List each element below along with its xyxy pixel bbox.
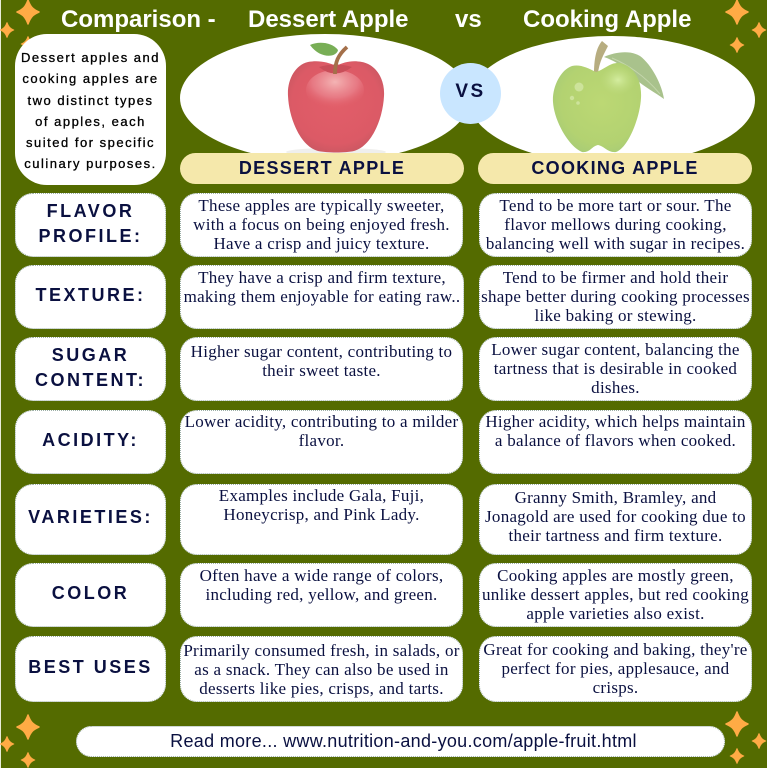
dessert text xyxy=(180,636,463,702)
cooking text: a balance of flavors when cooked. xyxy=(495,431,736,450)
dessert text xyxy=(180,265,464,329)
dessert text: their sweet taste. xyxy=(262,361,381,380)
intro text panel: culinary purposes. xyxy=(24,156,157,171)
footer link: Read more... www.nutrition-and-you.com/apple-fruit.html xyxy=(170,731,637,751)
row: acidity xyxy=(15,410,752,474)
label: TEXTURE: xyxy=(36,284,146,304)
cooking text: Tend to be firmer and hold their xyxy=(503,268,728,287)
cooking text: Granny Smith, Bramley, and xyxy=(515,488,716,507)
dessert text: Honeycrisp, and Pink Lady. xyxy=(223,505,420,524)
row: flavor profile xyxy=(15,193,752,257)
cooking text xyxy=(479,636,752,702)
label xyxy=(15,484,166,555)
intro text panel: Dessert apples and xyxy=(21,50,160,65)
header pill: dessert apple xyxy=(180,153,464,184)
cooking text xyxy=(479,410,752,474)
dessert text xyxy=(180,337,463,401)
cooking text: crisps. xyxy=(593,678,638,697)
cooking text xyxy=(479,265,752,329)
dessert text: including red, yellow, and green. xyxy=(205,585,438,604)
cooking text: balancing well with sugar in recipes. xyxy=(486,234,745,253)
cooking text: tartness that is desirable in cooked xyxy=(494,359,737,378)
green apple xyxy=(553,41,664,152)
dessert text: They have a crisp and firm texture, xyxy=(198,268,446,287)
label: CONTENT: xyxy=(35,370,146,390)
dessert text: as a snack. They can also be used in xyxy=(194,660,449,679)
header pill: cooking apple xyxy=(478,153,752,184)
label: COLOR xyxy=(52,582,129,602)
cooking text: Lower sugar content, balancing the xyxy=(491,340,740,359)
white oval: dessert xyxy=(180,34,470,162)
cooking text: shape better during cooking processes xyxy=(481,287,750,306)
label: FLAVOR xyxy=(47,201,134,221)
label xyxy=(15,636,166,702)
header pill: cooking apple: COOKING APPLE xyxy=(531,158,699,178)
dessert text xyxy=(180,193,463,257)
cooking text xyxy=(479,484,752,555)
cooking text: perfect for pies, applesauce, and xyxy=(502,659,729,678)
cooking text: Tend to be more tart or sour. The xyxy=(499,196,732,215)
title: Cooking Apple xyxy=(523,6,691,33)
row: sugar content xyxy=(15,337,752,401)
white oval: cooking xyxy=(469,36,755,164)
label xyxy=(15,337,166,401)
title: vs xyxy=(455,6,482,33)
intro text panel: cooking apples are xyxy=(22,71,159,86)
label xyxy=(15,563,166,627)
label: SUGAR xyxy=(52,345,129,365)
cooking text xyxy=(479,193,752,257)
dessert text: Lower acidity, contributing to a milder xyxy=(185,412,458,431)
cooking text: unlike dessert apples, but red cooking xyxy=(482,585,749,604)
row: best uses xyxy=(15,636,752,702)
row: varieties xyxy=(15,484,752,555)
footer link xyxy=(76,726,725,757)
label xyxy=(15,410,166,474)
VS badge: VS xyxy=(455,81,486,102)
left edge strip xyxy=(0,0,1,768)
row: texture xyxy=(15,265,752,329)
cooking text: apple varieties also exist. xyxy=(526,604,705,623)
label: VARIETIES: xyxy=(28,507,153,527)
title: Comparison - xyxy=(61,6,216,33)
intro text panel xyxy=(15,34,166,185)
cooking text: their tartness and firm texture. xyxy=(508,526,722,545)
dessert text: Often have a wide range of colors, xyxy=(200,566,443,585)
cooking text xyxy=(479,337,752,401)
cooking text xyxy=(479,563,752,627)
label: BEST USES xyxy=(28,656,153,676)
VS badge xyxy=(440,63,501,124)
title: Dessert Apple xyxy=(248,6,408,33)
cooking text: flavor mellows during cooking, xyxy=(504,215,727,234)
row: color xyxy=(15,563,752,627)
header pill: dessert apple: DESSERT APPLE xyxy=(239,158,405,178)
intro text panel: two distinct types xyxy=(28,93,154,108)
dessert text: flavor. xyxy=(299,431,344,450)
label: PROFILE: xyxy=(38,226,142,246)
dessert text: making them enjoyable for eating raw.. xyxy=(184,287,460,306)
dessert text xyxy=(180,410,463,474)
cooking text: Great for cooking and baking, they're xyxy=(483,640,748,659)
intro text panel: suited for specific xyxy=(26,135,155,150)
title xyxy=(61,6,691,33)
cooking text: dishes. xyxy=(591,378,640,397)
dessert text: These apples are typically sweeter, xyxy=(198,196,445,215)
dessert text: Have a crisp and juicy texture. xyxy=(213,234,430,253)
dessert text: Primarily consumed fresh, in salads, or xyxy=(183,641,460,660)
dessert text xyxy=(180,484,463,555)
cooking text: like baking or stewing. xyxy=(534,306,696,325)
cooking text: Jonagold are used for cooking due to xyxy=(485,507,746,526)
cooking text: Higher acidity, which helps maintain xyxy=(485,412,746,431)
cooking text: Cooking apples are mostly green, xyxy=(497,566,734,585)
label xyxy=(15,265,166,329)
intro text panel: of apples, each xyxy=(35,114,146,129)
red apple xyxy=(286,43,386,156)
label: ACIDITY: xyxy=(42,430,139,450)
dessert text: Examples include Gala, Fuji, xyxy=(219,486,424,505)
label xyxy=(15,193,166,257)
dessert text xyxy=(180,563,463,627)
dessert text: with a focus on being enjoyed fresh. xyxy=(193,215,450,234)
dessert text: Higher sugar content, contributing to xyxy=(191,342,452,361)
dessert text: desserts like pies, crisps, and tarts. xyxy=(199,679,444,698)
